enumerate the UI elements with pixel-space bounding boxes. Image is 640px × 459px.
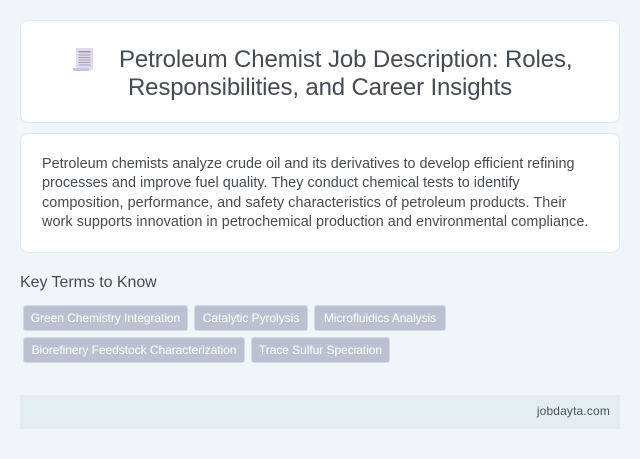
summary text: Petroleum chemists analyze crude oil and its derivatives to develop efficient refining [42, 156, 574, 172]
summary text: processes and improve fuel quality. They conduct chemical tests to identify [42, 175, 520, 191]
tag [23, 305, 188, 331]
tag [314, 305, 446, 331]
title panel [20, 20, 620, 123]
tag: Green Chemistry Integration [31, 311, 180, 325]
summary panel [20, 133, 620, 253]
summary text: work supports innovation in petrochemical production and environmental compliance. [42, 214, 588, 230]
section heading: key terms: Key Terms to Know [20, 274, 157, 291]
footer bar [20, 395, 620, 429]
tag: Microfluidics Analysis [324, 311, 436, 325]
tag [23, 337, 245, 363]
footer credit: jobdayta.com [537, 404, 610, 418]
summary text: composition, performance, and safety characteristics of petroleum products. Their [42, 195, 566, 211]
title heading [119, 46, 572, 101]
title heading: Responsibilities, and Career Insights [128, 74, 512, 101]
tag: Biorefinery Feedstock Characterization [32, 343, 236, 357]
tag: Catalytic Pyrolysis [203, 311, 299, 325]
tag: Trace Sulfur Speciation [259, 343, 382, 357]
title heading: Petroleum Chemist Job Description: Roles, [119, 46, 572, 73]
icon: document scroll [73, 48, 93, 71]
tag [194, 305, 308, 331]
tag [251, 337, 390, 363]
summary text [42, 156, 588, 230]
tag list [23, 305, 446, 363]
